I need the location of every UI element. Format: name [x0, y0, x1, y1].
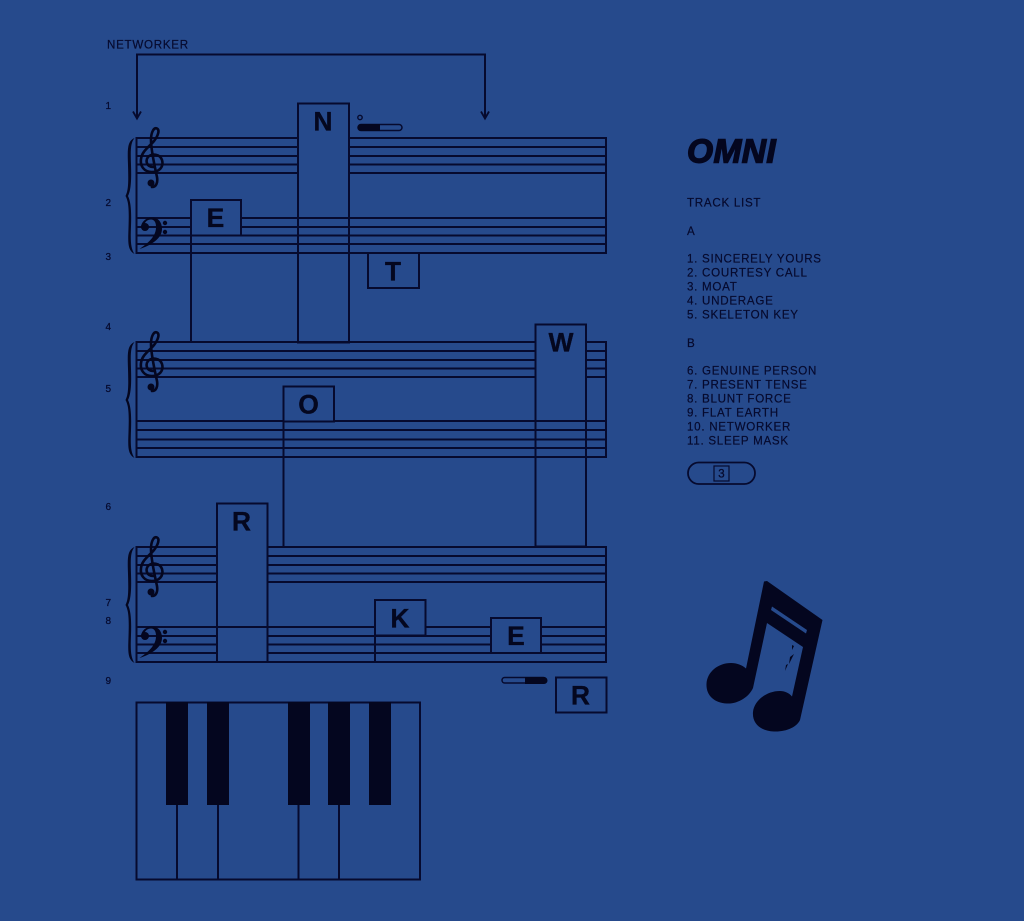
staff system 2: [126, 332, 607, 458]
letter block R final: [556, 678, 606, 712]
letter block O: [284, 386, 334, 547]
brace 3: [126, 547, 134, 663]
track list: 3. MOAT: [687, 280, 738, 294]
letter block W: [535, 324, 586, 546]
letter block R tall: R: [232, 506, 251, 536]
letter block N with slider: N: [313, 106, 333, 136]
letter block O: O: [298, 390, 319, 420]
measure numbers: 5: [106, 384, 112, 395]
track list: TRACK LIST: [687, 196, 761, 210]
letter block T: [368, 253, 419, 288]
measure numbers: [106, 101, 112, 687]
brace 1: [126, 138, 134, 254]
treble clef 3: [141, 537, 162, 596]
letter block W: W: [548, 328, 574, 358]
black keys: [166, 702, 391, 805]
treble clef 2: [141, 332, 162, 391]
letter block E lower: E: [507, 621, 525, 651]
track list: 9. FLAT EARTH: [687, 406, 779, 420]
treble clef 1: [141, 128, 162, 187]
measure numbers: 6: [106, 502, 112, 513]
band name: OMNI: OMNI: [687, 134, 776, 170]
measure numbers: 4: [106, 322, 112, 333]
measure numbers: 8: [106, 616, 112, 627]
staff system 3: [126, 537, 607, 663]
letter block E: E: [207, 203, 224, 233]
pill with number 3: [688, 462, 755, 484]
letter block E: [191, 200, 241, 342]
song title label: networker: NETWORKER: [107, 38, 189, 52]
track list: [687, 196, 822, 448]
white key dividers: [177, 805, 339, 880]
track list: 4. UNDERAGE: [687, 294, 774, 308]
track list: B: [687, 337, 695, 350]
measure numbers: 1: [106, 101, 112, 112]
track list: 8. BLUNT FORCE: [687, 392, 792, 406]
icon: beamed music notes: [706, 581, 822, 732]
measure numbers: 9: [106, 676, 112, 687]
track list: A: [687, 225, 695, 238]
letter block K: [375, 600, 426, 662]
slider control top: [358, 115, 402, 131]
track list: 11. SLEEP MASK: [687, 434, 789, 448]
pill with number 3: 3: [718, 468, 725, 480]
track list: 1. SINCERELY YOURS: [687, 252, 822, 266]
track list: 7. PRESENT TENSE: [687, 378, 808, 392]
slider control bottom: [502, 677, 548, 684]
measure numbers: 2: [106, 198, 112, 209]
letter block R final: R: [571, 680, 590, 710]
track list: 2. COURTESY CALL: [687, 266, 808, 280]
repeat bracket with arrows: [133, 54, 489, 118]
letter block K: K: [390, 604, 410, 634]
bass clef 1: [140, 218, 167, 249]
bass clef 3: [140, 626, 167, 658]
track list: 5. SKELETON KEY: [687, 308, 799, 322]
letter block N with slider: [298, 104, 349, 342]
measure numbers: 7: [106, 598, 112, 609]
letter block R tall: [217, 504, 268, 662]
track list: 6. GENUINE PERSON: [687, 364, 817, 378]
brace 2: [126, 342, 134, 458]
letter block E lower: [491, 618, 541, 653]
letter block T: T: [385, 256, 401, 286]
staff system 1: [126, 128, 607, 254]
piano keyboard: [136, 702, 420, 880]
measure numbers: 3: [106, 252, 112, 263]
track list: 10. NETWORKER: [687, 420, 791, 434]
